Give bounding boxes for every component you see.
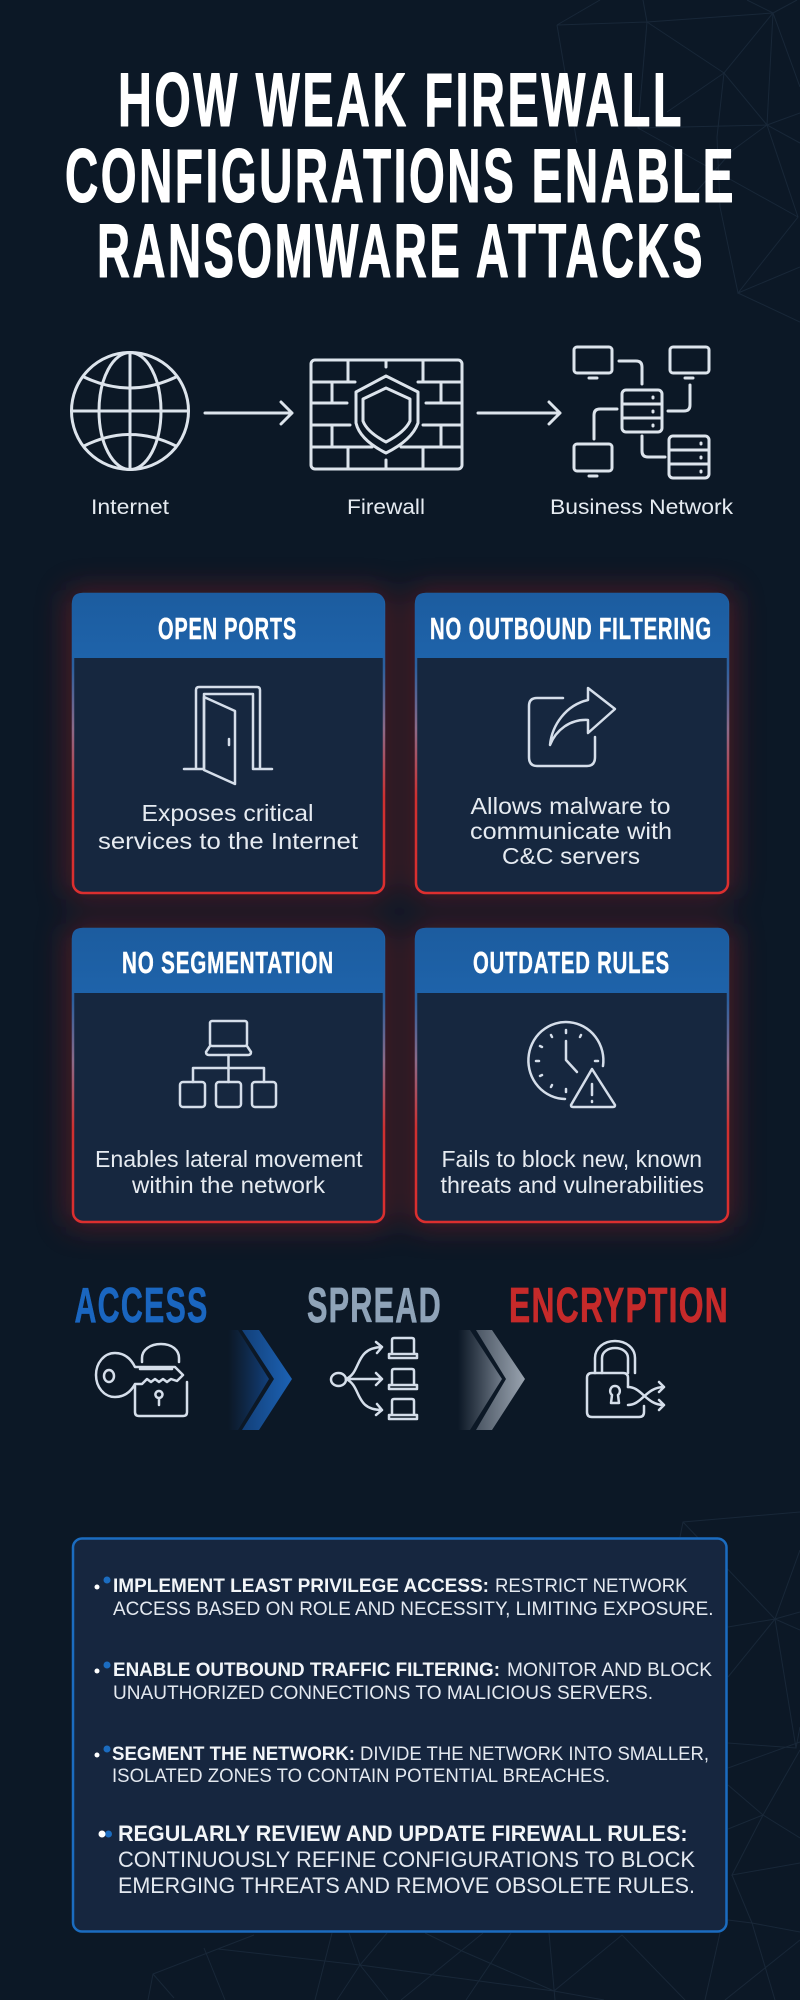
description: outdated rules: threats and vulnerabilities: [440, 1172, 704, 1198]
icon: key and padlock: [96, 1344, 187, 1416]
label: Internet: Internet: [91, 496, 169, 519]
recommendation: outbound filtering: [94, 1660, 712, 1704]
icon: firewall with shield: [311, 360, 462, 469]
recommendation: review rules: REGULARLY REVIEW AND UPDATE FIREWALL RULES:: [118, 1821, 688, 1846]
icon: share arrow out of box: [529, 688, 615, 766]
heading: spread: SPREAD: [307, 1279, 442, 1333]
panel: outdated rules: [415, 928, 728, 1222]
recommendation: least privilege: [94, 1576, 714, 1620]
heading: outdated rules: OUTDATED RULES: [473, 945, 670, 980]
arrow: chevron access to spread: [228, 1330, 292, 1430]
description: no segmentation: [95, 1146, 363, 1198]
panel: no outbound filtering: [415, 593, 728, 893]
description: outdated rules: Fails to block new, known: [442, 1146, 702, 1172]
heading: no segmentation: NO SEGMENTATION: [122, 945, 334, 980]
icon: padlock with shuffle arrows: [587, 1341, 664, 1417]
recommendation: least privilege: ACCESS BASED ON ROLE AND NECESSITY, LIMITING EXPOSURE.: [113, 1599, 714, 1620]
description: open ports: [98, 800, 359, 854]
recommendation: outbound filtering: MONITOR AND BLOCK: [507, 1660, 712, 1681]
recommendation: least privilege: IMPLEMENT LEAST PRIVILEGE ACCESS:: [113, 1576, 489, 1597]
recommendation: segmentation: SEGMENT THE NETWORK:: [112, 1744, 355, 1765]
heading: open ports: OPEN PORTS: [158, 611, 297, 646]
panel: recommendations: [73, 1538, 726, 1932]
arrow: internet to firewall: [205, 402, 292, 424]
recommendation: outbound filtering: UNAUTHORIZED CONNECTIONS TO MALICIOUS SERVERS.: [113, 1683, 653, 1704]
description: no segmentation: Enables lateral movement: [95, 1146, 363, 1172]
recommendation: segmentation: DIVIDE THE NETWORK INTO SMALLER,: [360, 1744, 709, 1765]
panel: no segmentation: [72, 928, 384, 1222]
icon: business network: [574, 347, 709, 478]
icon: laptop network tree: [180, 1021, 276, 1107]
description: outdated rules: [440, 1146, 704, 1198]
icon: clock with warning triangle: [528, 1022, 615, 1107]
description: no segmentation: within the network: [131, 1172, 326, 1198]
description: open ports: Exposes critical: [142, 800, 314, 826]
arrow: chevron spread to encryption: [458, 1330, 525, 1430]
description: no outbound filtering: C&C servers: [502, 843, 640, 869]
network flow diagram: [72, 347, 734, 519]
attack chain: [74, 1279, 729, 1430]
recommendation: outbound filtering: ENABLE OUTBOUND TRAFFIC FILTERING:: [113, 1660, 500, 1681]
heading: access: ACCESS: [74, 1279, 208, 1333]
recommendation: review rules: [98, 1821, 695, 1898]
recommendation: least privilege: RESTRICT NETWORK: [495, 1576, 688, 1597]
description: no outbound filtering: [470, 793, 672, 869]
icon: open door: [184, 687, 272, 784]
description: open ports: services to the Internet: [98, 828, 359, 854]
label: Firewall: Firewall: [347, 496, 425, 519]
description: no outbound filtering: communicate with: [470, 818, 672, 844]
icon: globe: [72, 352, 188, 470]
icon: branching laptops: [331, 1338, 417, 1419]
recommendation: segmentation: [94, 1744, 709, 1787]
recommendation: review rules: EMERGING THREATS AND REMOVE OBSOLETE RULES.: [118, 1873, 695, 1898]
description: no outbound filtering: Allows malware to: [470, 793, 670, 819]
title: [65, 58, 736, 294]
recommendation: review rules: CONTINUOUSLY REFINE CONFIGURATIONS TO BLOCK: [118, 1847, 695, 1872]
label: Business Network: Business Network: [550, 496, 734, 519]
recommendation: segmentation: ISOLATED ZONES TO CONTAIN POTENTIAL BREACHES.: [112, 1766, 610, 1787]
arrow: firewall to business network: [478, 402, 560, 424]
panel: open ports: [72, 593, 384, 893]
